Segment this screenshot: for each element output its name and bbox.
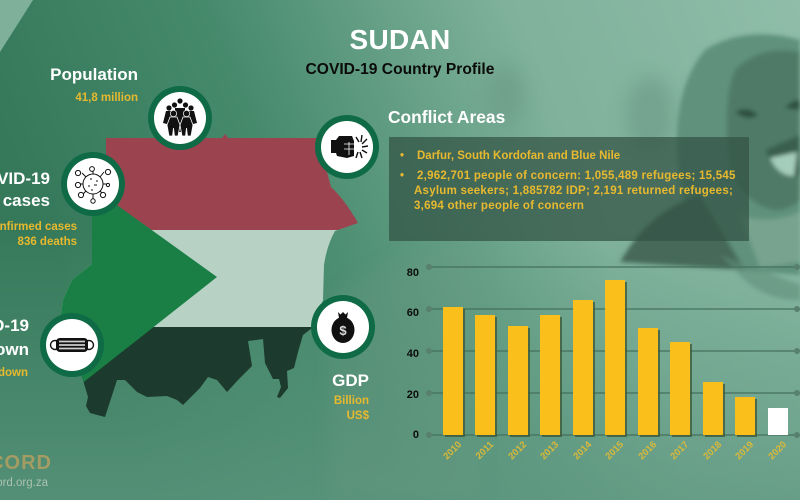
GDP unit: US$ bbox=[347, 410, 369, 422]
bullet: people of concern bbox=[400, 170, 736, 212]
covid cases heading: cases bbox=[3, 191, 50, 210]
x axis labels bbox=[441, 439, 789, 462]
x axis labels: 2016 bbox=[636, 439, 659, 462]
x axis labels: 2012 bbox=[506, 439, 529, 462]
bar shadows bbox=[445, 282, 757, 437]
bullet: people of concern: • bbox=[400, 170, 404, 182]
population value: 41,8 million bbox=[75, 92, 138, 104]
bullet: conflict regions bbox=[400, 150, 620, 162]
map of Sudan in flag colours bbox=[60, 134, 358, 417]
x axis labels: 2020 bbox=[766, 439, 789, 462]
icon: face mask bbox=[40, 313, 104, 377]
population heading: Population bbox=[50, 65, 138, 84]
conflict areas panel: Darfur, South Kordofan and Blue Nile bbox=[417, 150, 620, 162]
x axis labels: 2011 bbox=[474, 439, 497, 462]
covid cases values bbox=[0, 221, 77, 248]
x axis labels: 2014 bbox=[571, 439, 595, 462]
icon: fist bbox=[315, 115, 379, 179]
conflict areas heading: Conflict Areas bbox=[388, 107, 505, 127]
bullet: people of concern: 2,962,701 people of concern: 1,055,489 refugees; 15,545 bbox=[417, 170, 736, 182]
bullet: people of concern: 3,694 other people of concern bbox=[414, 200, 584, 212]
y axis labels: 80 bbox=[407, 267, 419, 279]
bullet: conflict regions: • bbox=[400, 150, 404, 162]
lockdown heading bbox=[0, 316, 29, 359]
bars 2010-2019 bbox=[443, 280, 755, 435]
gridlines bbox=[426, 264, 800, 438]
y axis labels: 40 bbox=[407, 348, 419, 360]
x axis labels: 2019 bbox=[733, 439, 756, 462]
x axis labels: 2015 bbox=[603, 439, 627, 462]
x axis labels: 2010 bbox=[441, 439, 464, 462]
covid cases heading bbox=[0, 169, 50, 210]
GDP unit: Billion bbox=[334, 395, 369, 407]
icon: money bag bbox=[311, 295, 375, 359]
conflict areas panel bbox=[389, 137, 749, 241]
y axis labels: 60 bbox=[407, 307, 419, 319]
x axis labels: 2017 bbox=[668, 439, 691, 462]
icon: virus bbox=[61, 152, 125, 216]
covid cases values: 836 deaths bbox=[18, 236, 77, 248]
y axis labels: 0 bbox=[413, 429, 419, 441]
icon: population bbox=[148, 86, 212, 150]
y axis labels: 20 bbox=[407, 389, 419, 401]
subtitle: COVID-19 Country Profile bbox=[306, 61, 494, 78]
GDP heading: GDP bbox=[332, 371, 369, 390]
icon: money bag: $ bbox=[339, 323, 347, 338]
title: SUDAN bbox=[349, 24, 451, 55]
GDP unit bbox=[334, 395, 369, 422]
y axis labels bbox=[407, 267, 419, 441]
bullet: people of concern: Asylum seekers; 1,885782 IDP; 2,191 returned refugees; bbox=[414, 185, 733, 197]
x axis labels: 2018 bbox=[701, 439, 724, 462]
x axis labels: 2013 bbox=[538, 439, 561, 462]
bar 2020 bbox=[768, 408, 788, 435]
